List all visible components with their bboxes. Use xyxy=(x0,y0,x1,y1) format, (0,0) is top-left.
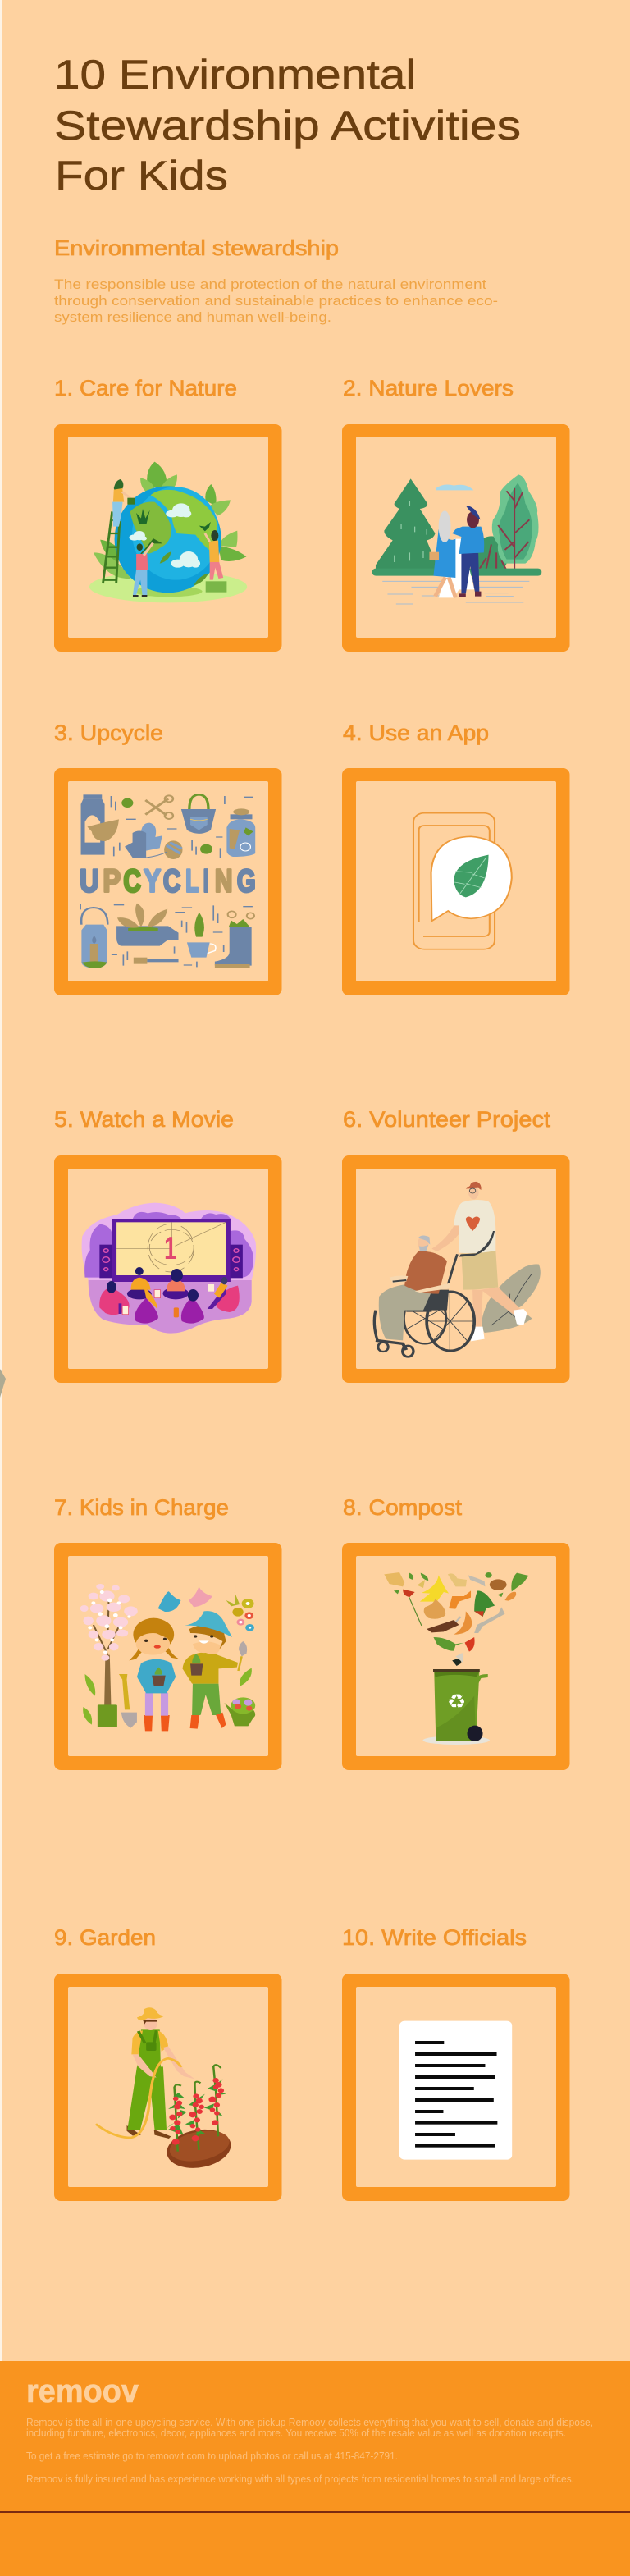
panel: 9 garden xyxy=(54,1925,282,2201)
illustration word: UPCYCLING: G xyxy=(237,864,256,899)
illustration: letter document xyxy=(399,2021,512,2160)
panel: 3 upcycle xyxy=(54,721,282,995)
frame 5 xyxy=(54,1155,282,1383)
illustration word: UPCYCLING: P xyxy=(103,864,121,899)
illustration word: UPCYCLING: L xyxy=(185,864,199,899)
illustration: upcycling collage xyxy=(80,794,256,968)
heading 9: 9. Garden xyxy=(54,1925,156,1950)
panel: 8 compost xyxy=(342,1495,569,1770)
definition text block xyxy=(54,277,498,325)
subheading: environmental stewardship: Environmental stewardship xyxy=(54,236,339,260)
heading 5: 5. Watch a Movie xyxy=(54,1107,234,1132)
illustration: outdoor movie screen xyxy=(82,1203,256,1334)
recycle symbol: ♻ xyxy=(447,1691,466,1713)
footer text block: To get a free estimate go to remoovit.com to upload photos or call us at 415-847-2791. xyxy=(26,2450,398,2462)
heading 6: 6. Volunteer Project xyxy=(343,1107,551,1132)
illustration word: UPCYCLING: C xyxy=(163,864,180,899)
footer text block xyxy=(26,2417,593,2485)
panel: 5 watch a movie xyxy=(54,1107,282,1383)
panel: 7 kids in charge xyxy=(54,1495,282,1770)
definition text block: through conservation and sustainable practices to enhance eco- xyxy=(54,293,498,309)
illustration: volunteer pushing wheelchair xyxy=(374,1182,541,1357)
frame 3 xyxy=(54,768,282,995)
illustration: phone with leaf bubble xyxy=(413,813,512,949)
heading 8: 8. Compost xyxy=(343,1495,463,1520)
illustration: outdoor movie screen: 1 xyxy=(164,1231,176,1266)
heading 2: 2. Nature Lovers xyxy=(343,376,514,400)
frame 6 xyxy=(342,1155,569,1383)
definition text block: system resilience and human well-being. xyxy=(54,309,331,325)
heading 10: 10. Write Officials xyxy=(342,1925,527,1950)
title xyxy=(54,52,521,199)
illustration: couple among trees xyxy=(372,474,541,604)
frame 9 xyxy=(54,1974,282,2201)
illustration word: UPCYCLING xyxy=(80,864,256,899)
frame 10 xyxy=(342,1974,569,2201)
footer text block: Remoov is the all-in-one upcycling service. With one pickup Remoov collects everything that you want to sell, donate and dispose, xyxy=(26,2417,593,2428)
frame 2 xyxy=(342,424,569,652)
heading 1: 1. Care for Nature xyxy=(54,376,237,400)
title: Stewardship Activities xyxy=(54,103,521,149)
panel: 1 care for nature xyxy=(54,376,282,652)
illustration: people caring for globe xyxy=(89,462,247,602)
illustration: compost bin with food scraps xyxy=(384,1572,529,1745)
panel: 4 use an app xyxy=(342,721,569,995)
heading 4: 4. Use an App xyxy=(343,721,489,745)
panel: 2 nature lovers xyxy=(342,376,569,652)
frame 1 xyxy=(54,424,282,652)
illustration: kids gardening xyxy=(80,1584,255,1731)
illustration: gardener watering tomatoes xyxy=(96,2007,236,2174)
frame 8 xyxy=(342,1543,569,1770)
footer text block: Remoov is fully insured and has experience working with all types of projects from residential homes to small and large offices. xyxy=(26,2473,574,2485)
panel: 6 volunteer project xyxy=(342,1107,569,1383)
footer logo: remoov: remoov xyxy=(26,2373,139,2409)
illustration word: UPCYCLING: I xyxy=(203,864,208,899)
panel: 10 write officials xyxy=(342,1925,569,2201)
illustration word: UPCYCLING: N xyxy=(215,864,232,899)
heading 7: 7. Kids in Charge xyxy=(54,1495,229,1520)
definition text block: The responsible use and protection of the natural environment xyxy=(54,277,486,292)
footer text block: including furniture, electronics, decor, appliances and more. You receive 50% of the resale value as well as donation receipts. xyxy=(26,2427,566,2439)
illustration word: UPCYCLING: C xyxy=(123,864,141,899)
heading 3: 3. Upcycle xyxy=(54,721,163,745)
illustration word: UPCYCLING: U xyxy=(80,864,99,899)
frame 4 xyxy=(342,768,569,995)
title: For Kids xyxy=(55,153,228,199)
footer band xyxy=(0,2361,630,2576)
illustration word: UPCYCLING: Y xyxy=(144,864,161,899)
title: 10 Environmental xyxy=(54,52,416,98)
frame 7 xyxy=(54,1543,282,1770)
